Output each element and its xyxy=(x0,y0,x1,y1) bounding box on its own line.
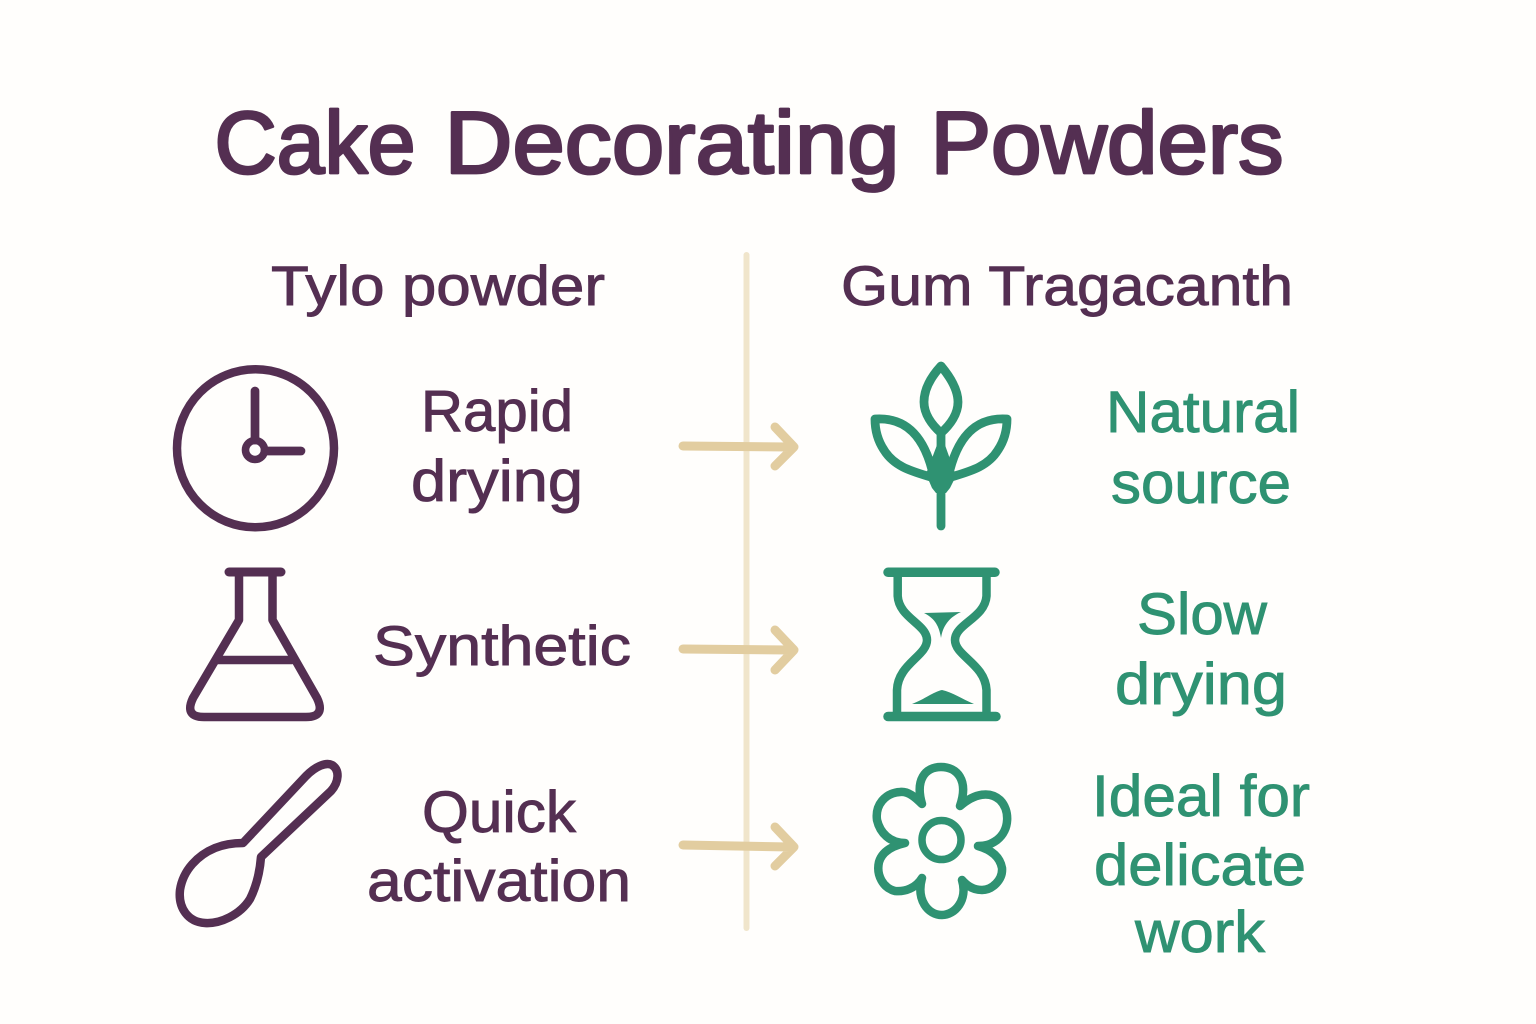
text: Natural source: Natural xyxy=(1106,380,1300,445)
icon: flask xyxy=(190,572,320,717)
text: Slow drying: Slow xyxy=(1137,582,1268,647)
icon: plant xyxy=(875,366,1007,526)
text: Ideal for delicate work: delicate xyxy=(1094,833,1306,898)
panel: Tylo powder xyxy=(177,254,631,923)
title xyxy=(214,93,1284,192)
text: Natural source xyxy=(1106,380,1300,516)
arrow 1 xyxy=(683,427,794,466)
text: Quick activation: activation xyxy=(367,849,631,914)
heading: Tylo powder: Tylo powder xyxy=(271,254,605,317)
icon: hourglass xyxy=(888,572,996,716)
text: Rapid drying: Rapid xyxy=(421,379,573,444)
icon: clock xyxy=(177,369,334,527)
text: Natural source: source xyxy=(1111,451,1291,516)
title: Cake xyxy=(214,93,416,192)
text: Ideal for delicate work xyxy=(1092,764,1310,965)
text: Quick activation xyxy=(367,780,631,914)
text: Rapid drying: drying xyxy=(411,449,583,514)
text: Synthetic: Synthetic xyxy=(373,614,631,677)
heading: Gum Tragacanth: Gum Tragacanth xyxy=(841,254,1293,317)
text: Slow drying xyxy=(1115,582,1287,717)
text: Slow drying: drying xyxy=(1115,652,1287,717)
arrow 2 xyxy=(683,630,794,670)
icon: spoon xyxy=(180,764,338,923)
text: Ideal for delicate work: Ideal for xyxy=(1092,764,1310,829)
panel: Gum Tragacanth xyxy=(841,254,1310,965)
arrow 3 xyxy=(683,827,794,866)
text: Rapid drying xyxy=(411,379,583,514)
center divider xyxy=(744,252,750,931)
title: Powders xyxy=(930,93,1284,192)
title: Decorating xyxy=(444,93,900,192)
text: Ideal for delicate work: work xyxy=(1134,900,1266,965)
text: Quick activation: Quick xyxy=(422,780,577,845)
icon: flower xyxy=(877,767,1007,915)
